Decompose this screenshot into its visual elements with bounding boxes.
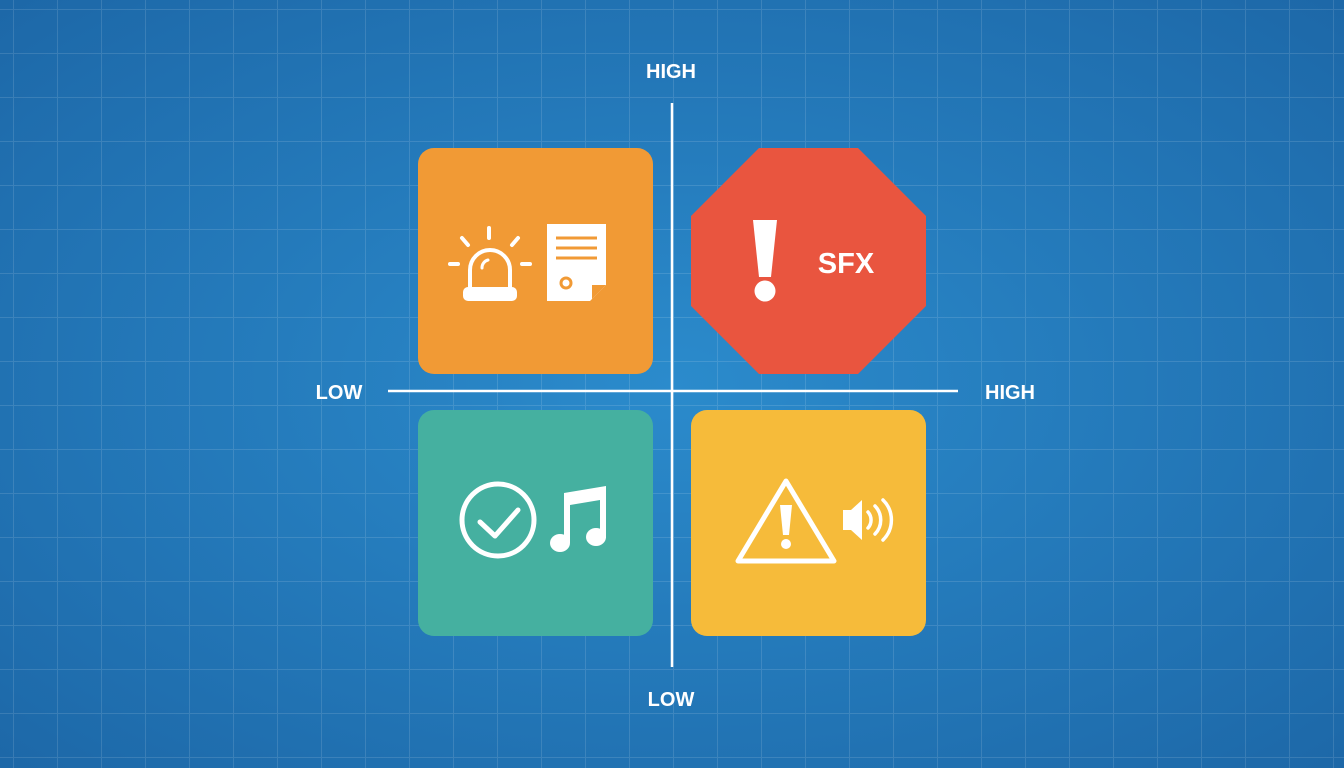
axis: vertical	[671, 103, 673, 667]
panel: teal bottom-left	[418, 410, 653, 636]
label: bottom LOW: LOW	[648, 689, 694, 711]
label: left LOW: LOW	[316, 382, 362, 404]
axis: horizontal	[388, 390, 958, 392]
icon: check circle	[462, 484, 534, 556]
panel: yellow bottom-right	[691, 410, 926, 636]
label: top HIGH: HIGH	[646, 61, 696, 83]
panel: red octagon	[691, 148, 926, 374]
label: right HIGH: HIGH	[985, 382, 1035, 404]
icon: document	[547, 224, 606, 301]
icon: siren	[450, 228, 530, 299]
icon: music note	[550, 486, 606, 552]
text: SFX: SFX	[818, 248, 875, 280]
icon: warning triangle	[738, 481, 834, 561]
panel: orange top-left	[418, 148, 653, 374]
icon: speaker	[843, 500, 891, 540]
icon: exclamation	[753, 220, 777, 302]
